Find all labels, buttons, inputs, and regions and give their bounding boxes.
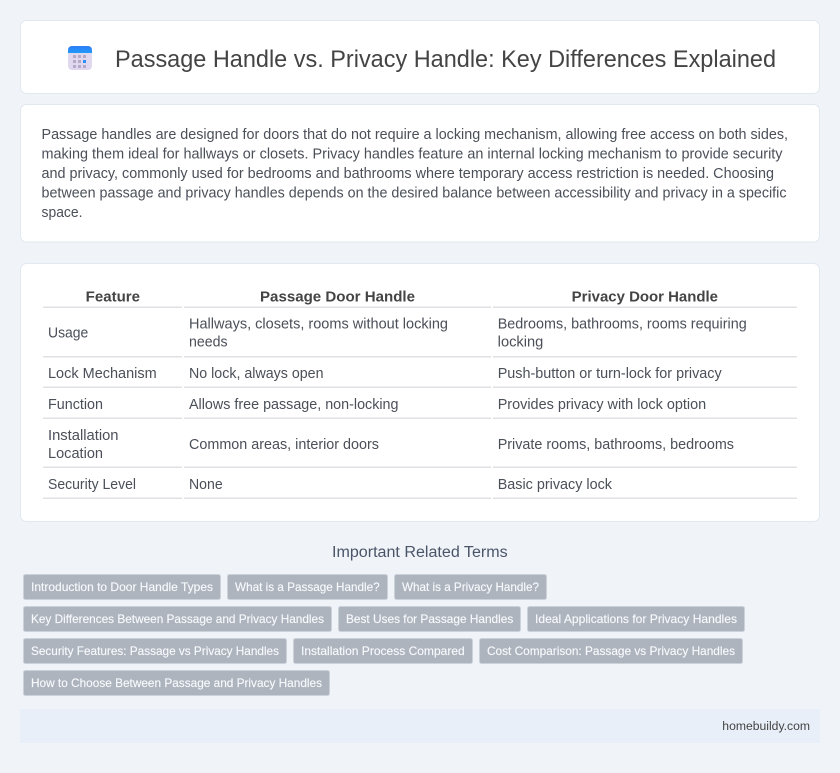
- row: usage: Bedrooms, bathrooms, rooms requiring: [498, 316, 747, 332]
- row: installation location: [48, 428, 734, 462]
- tag row 4: How to Choose Between Passage and Privacy Handles: [31, 676, 322, 690]
- footer source text: homebuildy.com: [722, 719, 810, 733]
- row: lock mechanism: [48, 366, 722, 382]
- row: function: Allows free passage, non-locking: [189, 397, 398, 413]
- intro paragraph: between passage and privacy handles depends on the desired balance between accessibility and privacy in a specific: [42, 186, 786, 202]
- row: usage: needs: [189, 335, 228, 351]
- tag row 2: Best Uses for Passage Handles: [346, 612, 513, 626]
- tag row 3: Installation Process Compared: [301, 644, 465, 658]
- tag row 2: Ideal Applications for Privacy Handles: [535, 612, 737, 626]
- tag row 1: What is a Privacy Handle?: [402, 580, 539, 594]
- row: installation location: Common areas, interior doors: [189, 437, 379, 453]
- icon: calendar: [68, 46, 92, 70]
- table header row: Privacy Door Handle: [572, 290, 718, 306]
- header panel: [20, 20, 820, 94]
- row: usage: [48, 316, 747, 351]
- row: usage: Usage: [48, 326, 88, 342]
- row: usage: locking: [498, 335, 543, 351]
- tag row 2: [24, 606, 744, 632]
- row: lock mechanism: Push-button or turn-lock for privacy: [498, 366, 722, 382]
- row: installation location: Installation: [48, 428, 118, 444]
- intro paragraph: [42, 127, 788, 221]
- row: security level: Security Level: [48, 477, 136, 493]
- intro paragraph: Passage handles are designed for doors that do not require a locking mechanism, allowing free access on both sides,: [42, 127, 788, 143]
- tag row 1: What is a Passage Handle?: [235, 580, 380, 594]
- row: function: Function: [48, 397, 103, 413]
- tag row 2: Key Differences Between Passage and Privacy Handles: [31, 612, 324, 626]
- intro paragraph: space.: [42, 205, 82, 221]
- table header row: [86, 290, 718, 306]
- tag row 4: [24, 670, 330, 696]
- row: security level: [48, 477, 613, 493]
- row: usage: Hallways, closets, rooms without locking: [189, 316, 448, 332]
- title: Passage Handle vs. Privacy Handle: Key Differences Explained: [115, 46, 776, 73]
- row: function: Provides privacy with lock option: [498, 397, 706, 413]
- panel: comparison table: [20, 264, 820, 522]
- tag row 3: Security Features: Passage vs Privacy Handles: [31, 644, 279, 658]
- row: lock mechanism: Lock Mechanism: [48, 366, 157, 382]
- row: security level: Basic privacy lock: [498, 477, 613, 493]
- table header row: Feature: [86, 290, 140, 306]
- row: installation location: Location: [48, 446, 103, 462]
- tag row 3: Cost Comparison: Passage vs Privacy Handles: [487, 644, 735, 658]
- tag row 3: [24, 638, 742, 664]
- tag row 1: Introduction to Door Handle Types: [31, 580, 213, 594]
- row: function: [48, 397, 706, 413]
- row: lock mechanism: No lock, always open: [189, 366, 324, 382]
- intro paragraph: making them ideal for hallways or closets. Privacy handles feature an internal locking mechanism to provide security: [42, 146, 783, 162]
- row: security level: None: [189, 477, 223, 493]
- table header row: Passage Door Handle: [260, 290, 415, 306]
- related terms section: [24, 544, 744, 696]
- footer bar: [20, 709, 820, 743]
- tag row 1: [24, 574, 546, 600]
- row: installation location: Private rooms, bathrooms, bedrooms: [498, 437, 734, 453]
- intro paragraph: and privacy, commonly used for bedrooms and bathrooms where temporary access restriction is needed. Choosing: [42, 166, 774, 182]
- panel: intro text: [20, 104, 820, 242]
- heading: important related terms: Important Related Terms: [332, 544, 508, 561]
